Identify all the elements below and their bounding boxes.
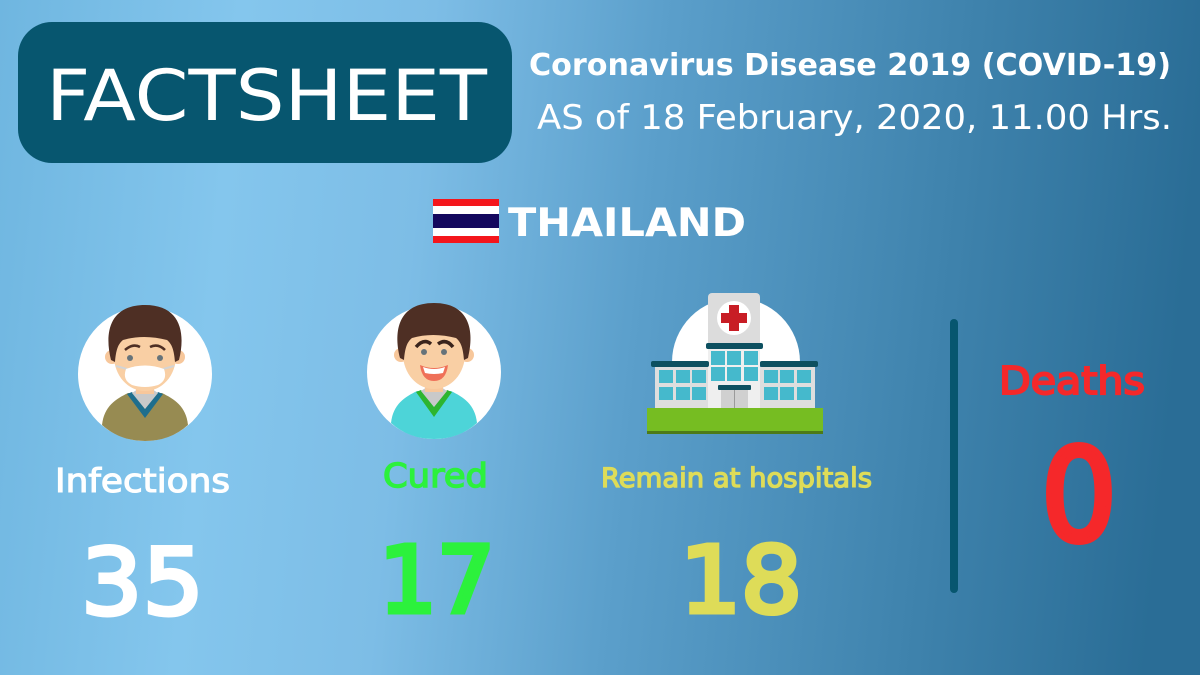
label: Deaths 0: Deaths xyxy=(999,359,1145,403)
label: Remain at hospitals 18: 18 xyxy=(680,527,802,634)
title badge: FACTSHEET: FACTSHEET xyxy=(46,55,487,137)
label: Infections 35 xyxy=(55,461,230,636)
label: Cured 17: 17 xyxy=(379,527,495,634)
icon: hospital xyxy=(647,293,823,434)
label: Remain at hospitals 18: Remain at hospitals xyxy=(601,463,872,494)
label: Remain at hospitals 18 xyxy=(601,463,872,634)
label: Cured 17: Cured xyxy=(383,456,488,495)
label: Infections 35: 35 xyxy=(81,529,204,636)
icon: smiling man xyxy=(367,303,501,439)
divider xyxy=(950,319,958,593)
windows xyxy=(659,351,811,400)
heading: disease and date: Coronavirus Disease 2019 (COVID-19) xyxy=(529,48,1171,83)
label: Deaths 0 xyxy=(999,359,1145,571)
country: Thailand flag and name xyxy=(433,199,746,246)
icon: Thai flag xyxy=(433,199,499,243)
heading: disease and date xyxy=(529,48,1172,138)
label: Infections 35: Infections xyxy=(55,461,230,500)
label: Deaths 0: 0 xyxy=(1041,422,1117,571)
heading: disease and date: AS of 18 February, 2020, 11.00 Hrs. xyxy=(537,98,1172,138)
icon: masked man xyxy=(78,305,212,441)
label: Cured 17 xyxy=(379,456,495,634)
country: Thailand flag and name: THAILAND xyxy=(508,201,746,246)
title badge: FACTSHEET xyxy=(18,22,512,163)
